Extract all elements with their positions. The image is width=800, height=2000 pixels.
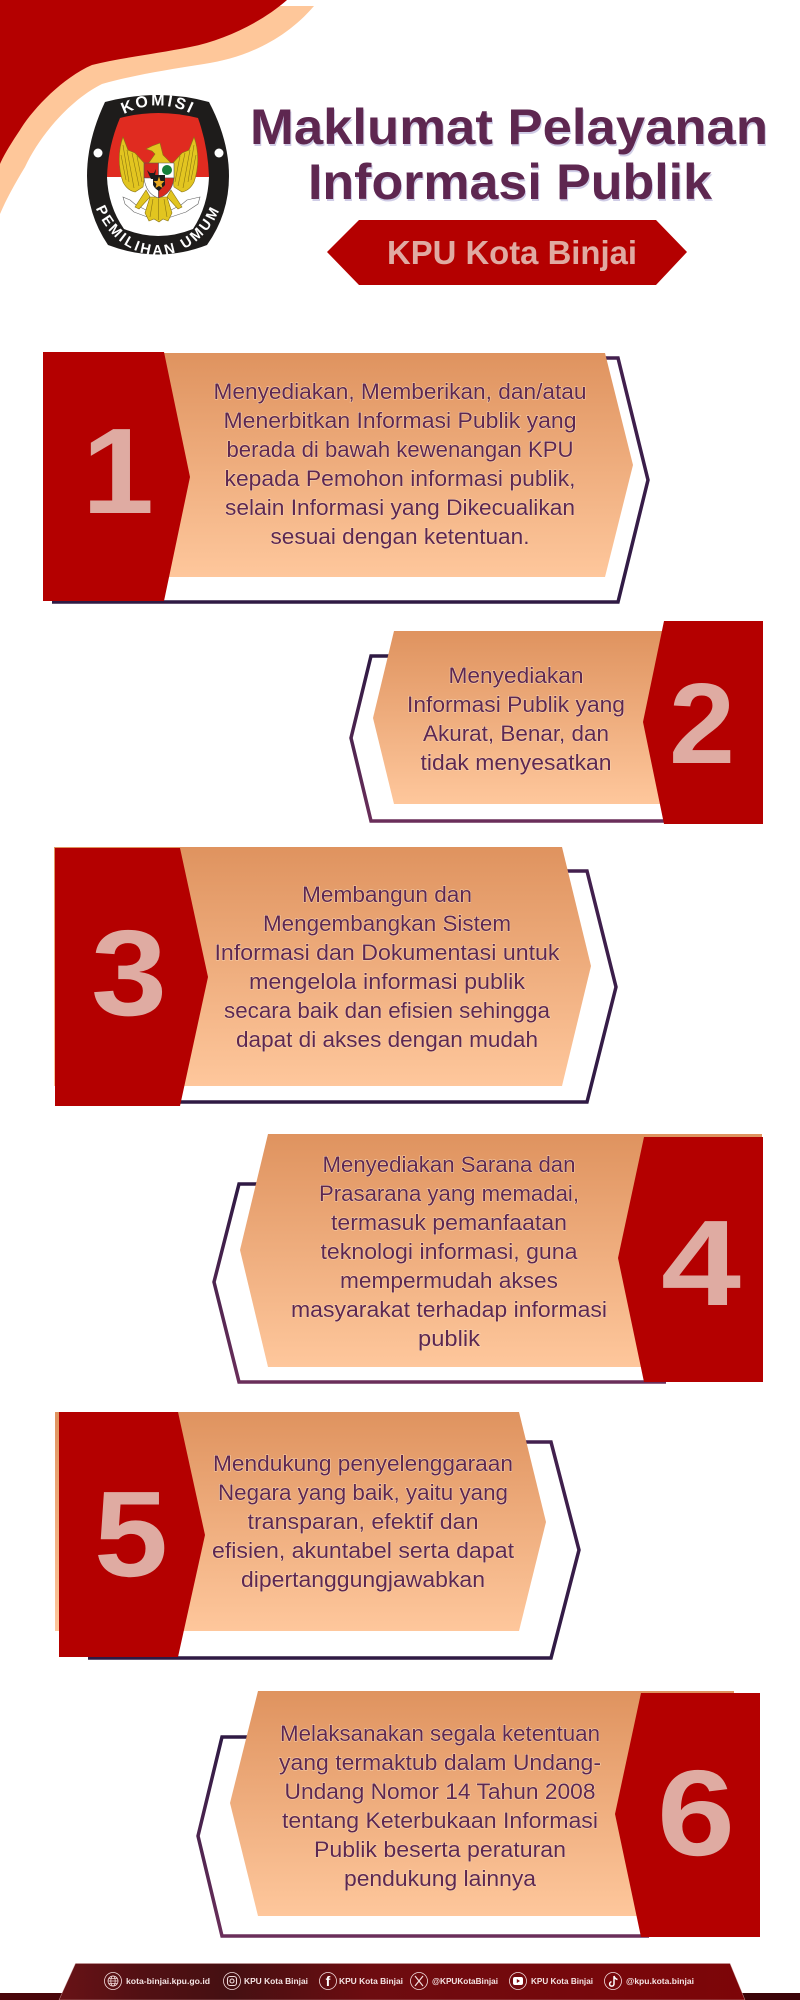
X text: @KPUKotaBinjai: [432, 1977, 498, 1986]
item text: teknologi informasi, guna: [320, 1239, 578, 1264]
item text: Membangun dan: [302, 882, 472, 907]
orange arrow: [230, 1691, 734, 1916]
item text: efisien, akuntabel serta dapat: [212, 1538, 514, 1563]
item text: Negara yang baik, yaitu yang: [218, 1480, 508, 1505]
item text: mempermudah akses: [340, 1268, 558, 1293]
youtube text: KPU Kota Binjai: [531, 1977, 593, 1986]
footer band: [59, 1964, 745, 2000]
panel: item 1: [43, 352, 648, 602]
item text: Mengembangkan Sistem: [263, 911, 511, 936]
red number block: [615, 1693, 760, 1937]
title line 1: Maklumat Pelayanan: [250, 99, 768, 155]
item text: Melaksanakan segala ketentuan: [280, 1721, 600, 1746]
item text: selain Informasi yang Dikecualikan: [225, 495, 575, 520]
item text: Undang Nomor 14 Tahun 2008: [284, 1779, 596, 1804]
badge text: KPU Kota Binjai: [387, 234, 637, 271]
red number block: [618, 1137, 763, 1382]
item text: transparan, efektif dan: [248, 1509, 478, 1534]
banner: [123, 197, 200, 218]
icon: facebook: f: [326, 1973, 331, 1989]
orange arrow: [373, 631, 670, 804]
outline arrow: [198, 1737, 649, 1936]
outline arrow: [170, 871, 616, 1102]
orange arrow: [130, 353, 633, 577]
subtitle badge: [327, 220, 687, 285]
number: 2: [669, 661, 735, 788]
shield quadrants: [144, 163, 158, 178]
logo text PEMILIHAN UMUM: PEMILIHAN UMUM: [96, 204, 219, 254]
left wing: [119, 137, 146, 192]
outline arrow: [52, 358, 648, 602]
item text: Informasi dan Dokumentasi untuk: [214, 940, 561, 965]
item text: Informasi Publik yang: [407, 692, 625, 717]
title: [250, 99, 768, 210]
footer bar: [0, 1964, 800, 2000]
icon: youtube: [510, 1972, 526, 1990]
red number block: [59, 1412, 205, 1657]
orange arrow: [240, 1134, 762, 1367]
icon: X: [410, 1972, 428, 1990]
item text: berada di bawah kewenangan KPU: [226, 437, 574, 462]
item text: [279, 1721, 601, 1891]
item text: sesuai dengan ketentuan.: [270, 524, 530, 549]
item text: termasuk pemanfaatan: [331, 1210, 567, 1235]
logo red and white field: [107, 113, 209, 236]
panel: item 4: [214, 1134, 763, 1382]
item text: pendukung lainnya: [344, 1866, 537, 1891]
item text: dapat di akses dengan mudah: [236, 1027, 538, 1052]
legs: [135, 190, 182, 209]
outline arrow: [88, 1442, 579, 1658]
item text: Menyediakan: [448, 663, 584, 688]
item text: publik: [418, 1326, 481, 1351]
outline arrow: [214, 1184, 666, 1382]
facebook text: KPU Kota Binjai: [339, 1977, 403, 1986]
orange arrow: [54, 847, 591, 1086]
head and neck: [146, 143, 172, 164]
icon: facebook: [320, 1972, 336, 1990]
orange arrow: [55, 1412, 546, 1631]
instagram text: KPU Kota Binjai: [244, 1977, 308, 1986]
item text: dipertanggungjawabkan: [241, 1567, 485, 1592]
decorative corner swoosh: [0, 0, 314, 214]
red number block: [43, 352, 190, 601]
item text: [407, 663, 625, 775]
logo text KOMISI: KOMISI: [120, 95, 194, 114]
icon: garuda: [119, 137, 200, 222]
tiktok text: @kpu.kota.binjai: [626, 1977, 694, 1986]
logo black shield: [87, 95, 229, 254]
title line 2: Informasi Publik: [308, 154, 712, 210]
item text: tentang Keterbukaan Informasi: [282, 1808, 598, 1833]
panel: item 6: [198, 1691, 760, 1937]
center shield and star: [153, 175, 165, 191]
item text: [212, 1451, 514, 1592]
red number block: [55, 848, 208, 1106]
outline arrow: [351, 656, 670, 821]
item text: mengelola informasi publik: [249, 969, 526, 994]
panel: item 3: [54, 847, 616, 1106]
item text: [214, 379, 586, 549]
item text: Mendukung penyelenggaraan: [213, 1451, 513, 1476]
icon: website: [104, 1972, 122, 1990]
number: 1: [82, 403, 154, 539]
item text: [214, 882, 561, 1052]
item text: tidak menyesatkan: [420, 750, 612, 775]
number: 6: [657, 1745, 735, 1881]
item text: [291, 1152, 607, 1351]
item text: masyarakat terhadap informasi: [291, 1297, 607, 1322]
tail: [145, 197, 172, 222]
website text: kota-binjai.kpu.go.id: [126, 1977, 210, 1986]
item text: Publik beserta peraturan: [314, 1837, 566, 1862]
logo white dots: [94, 148, 224, 158]
number: 3: [91, 905, 167, 1041]
panel: item 2: [351, 621, 763, 824]
icon: instagram: [224, 1972, 240, 1990]
item text: kepada Pemohon informasi publik,: [224, 466, 576, 491]
number: 5: [94, 1466, 168, 1602]
item text: Menyediakan Sarana dan: [322, 1152, 576, 1177]
item text: Menyediakan, Memberikan, dan/atau: [214, 379, 586, 404]
icon: tiktok: [604, 1972, 622, 1990]
item text: yang termaktub dalam Undang-: [279, 1750, 601, 1775]
item text: Prasarana yang memadai,: [319, 1181, 579, 1206]
footer side strips: [0, 1993, 800, 2000]
tree and bull: [162, 165, 172, 175]
panel: item 5: [55, 1412, 579, 1658]
item text: Menerbitkan Informasi Publik yang: [224, 408, 576, 433]
right wing: [171, 137, 198, 192]
wing feathers: [121, 145, 196, 188]
red number block: [643, 621, 763, 824]
number: 4: [661, 1195, 741, 1331]
item text: Akurat, Benar, dan: [423, 721, 609, 746]
item text: secara baik dan efisien sehingga: [224, 998, 551, 1023]
logo: KPU emblem: [87, 95, 229, 254]
